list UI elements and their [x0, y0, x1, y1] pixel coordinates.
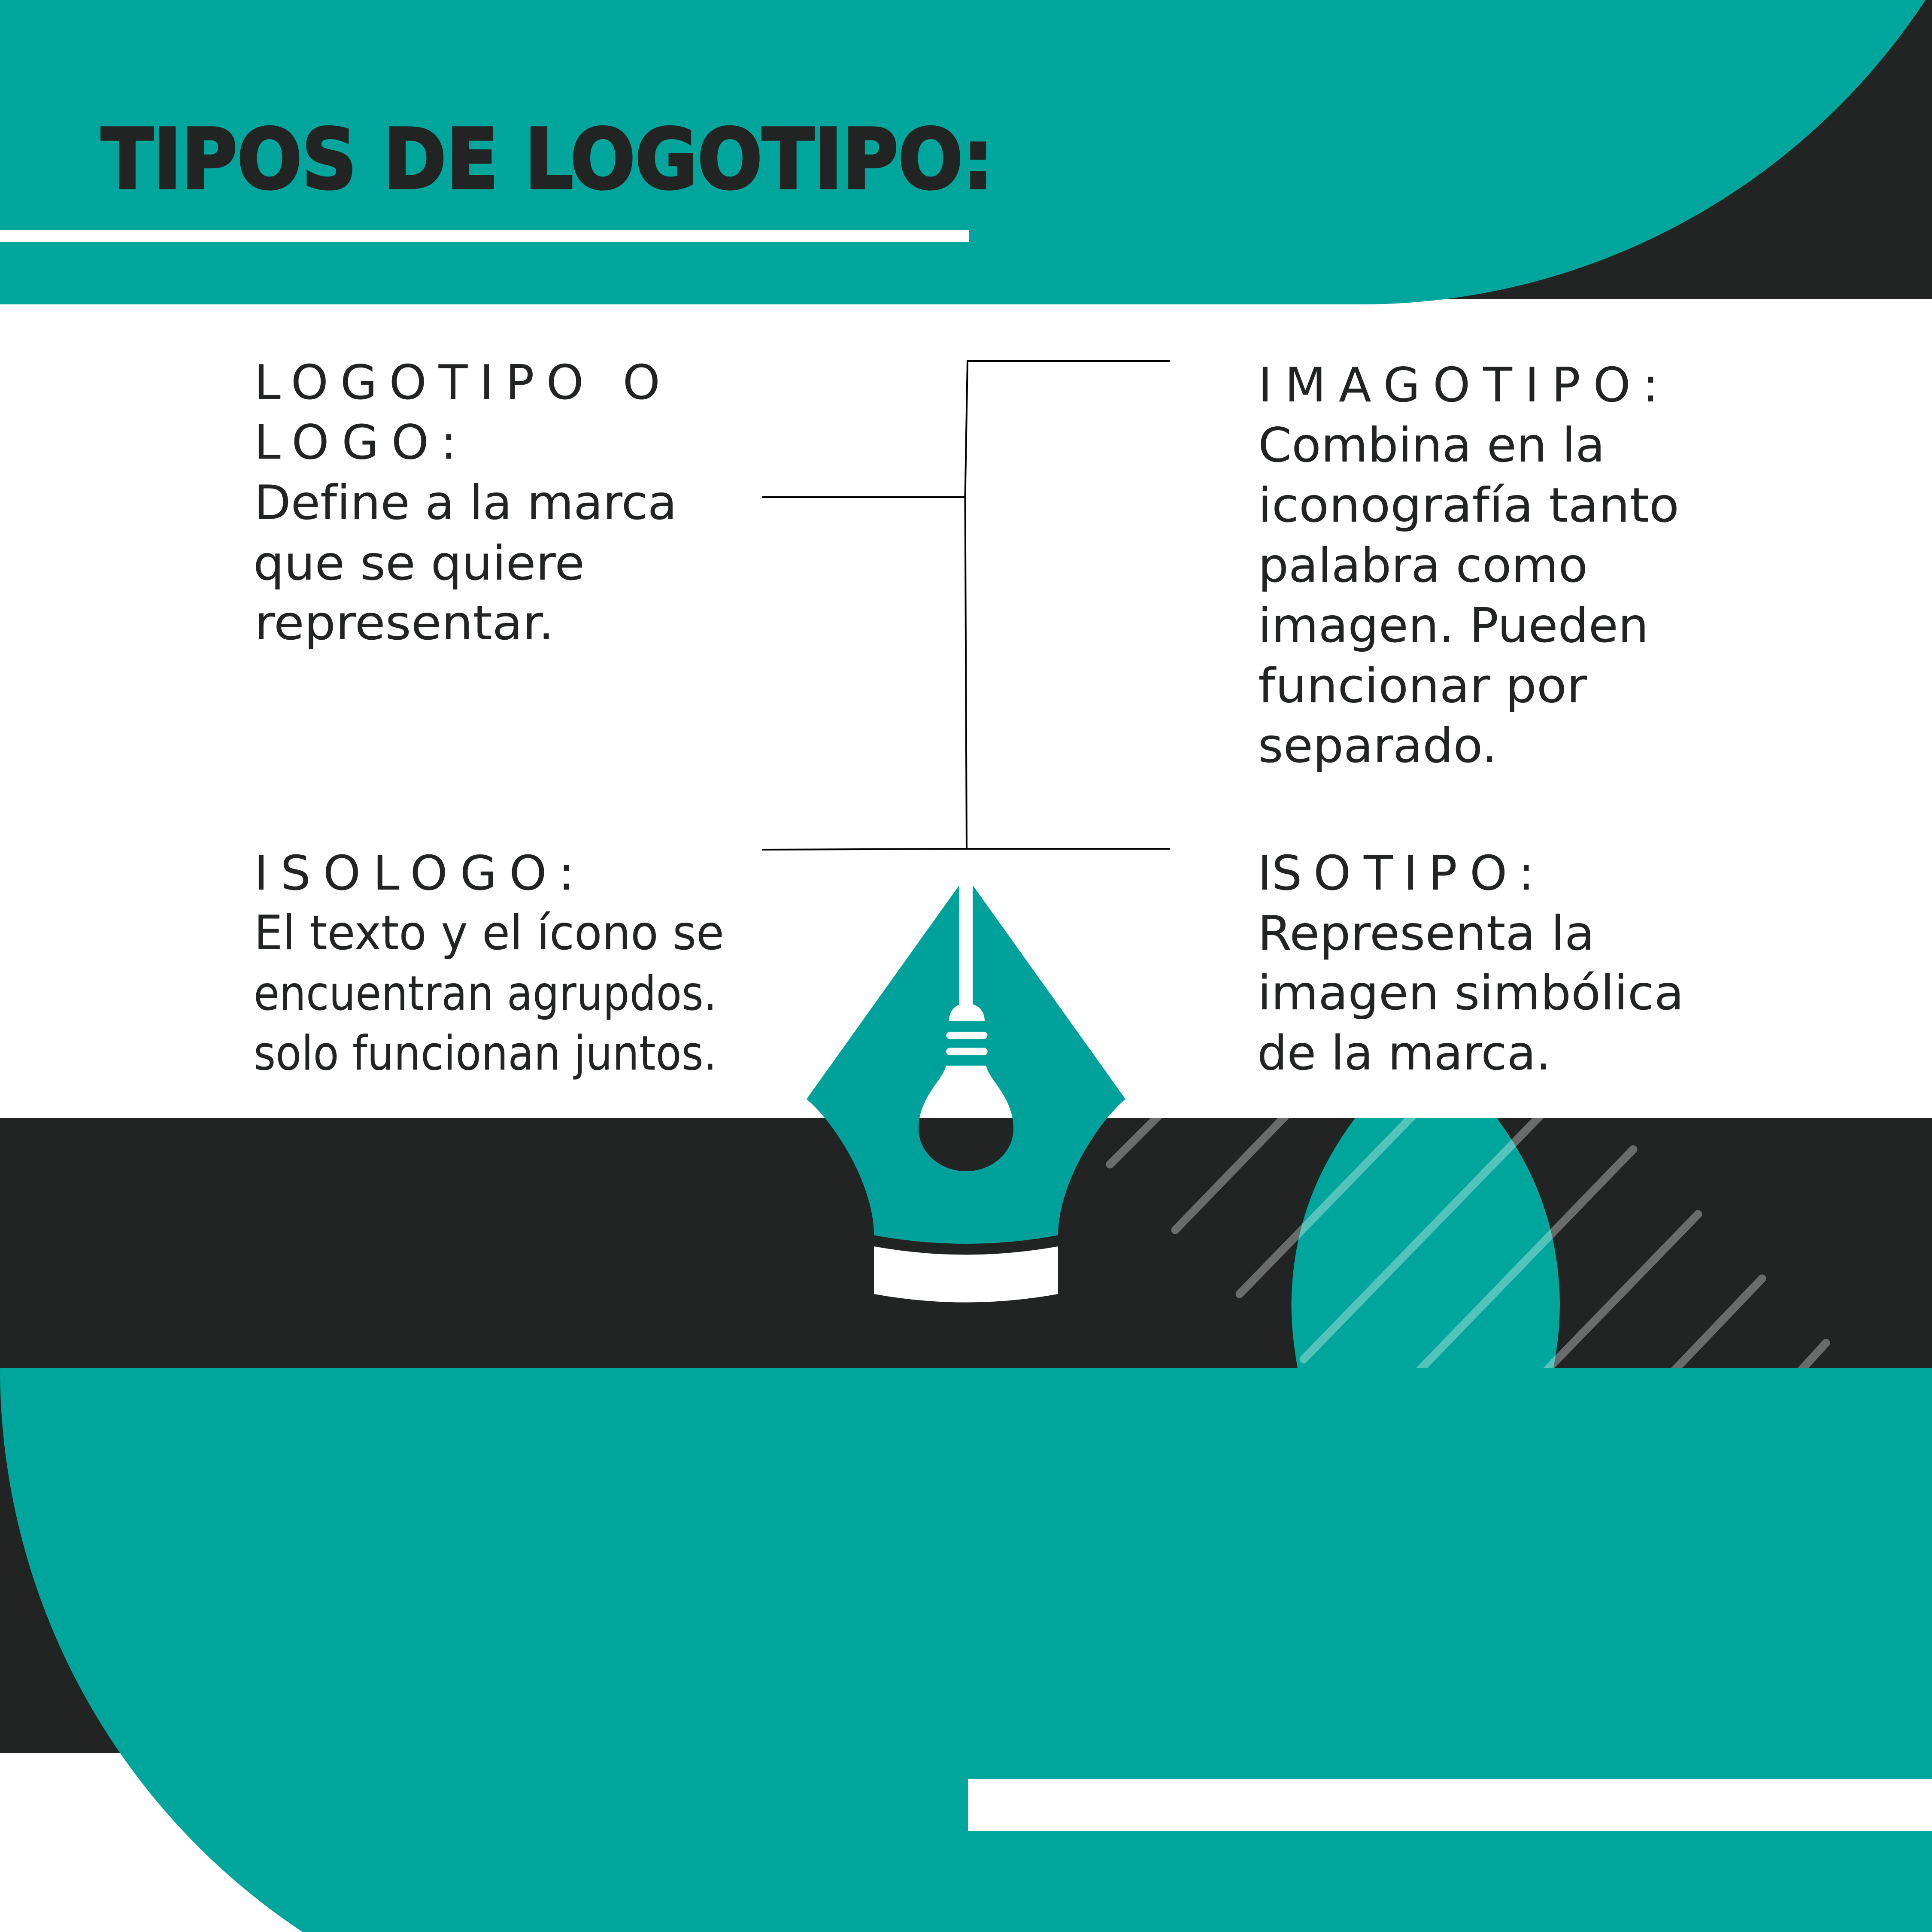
- text block: logotipo o logo: que se quiere: [253, 536, 585, 591]
- text block: imagotipo: funcionar por: [1258, 659, 1587, 714]
- text block: imagotipo: [1258, 358, 1679, 774]
- glass drop shape: [1292, 1118, 1560, 1368]
- text block: imagotipo: palabra como: [1258, 538, 1588, 593]
- icon: pen nib with light bulb: [807, 885, 1125, 1303]
- bracket connector lines: [762, 361, 1170, 850]
- text block: isotipo: de la marca.: [1257, 1026, 1551, 1081]
- text block: logotipo o logo: Define a la marca: [254, 475, 677, 531]
- text block: isologo: ISOLOGO:: [254, 846, 574, 901]
- text block: isologo: El texto y el ícono se: [254, 905, 724, 961]
- text block: isologo: encuentran agrupdos.: [254, 966, 717, 1021]
- text block: logotipo o logo: representar.: [255, 595, 554, 651]
- icon: nib collar: [874, 1246, 1058, 1303]
- text block: isologo: [254, 846, 724, 1081]
- diagonal glass stripes: [1110, 1115, 1826, 1373]
- header panel: teal curved: [0, 0, 1926, 304]
- text block: imagotipo: separado.: [1258, 718, 1497, 774]
- text block: imagotipo: iconografía tanto: [1258, 478, 1679, 533]
- text block: imagotipo: Combina en la: [1258, 418, 1605, 473]
- text block: isotipo: Representa la: [1258, 906, 1595, 961]
- text block: imagotipo: imagen. Pueden: [1258, 598, 1649, 653]
- title: TIPOS DE LOGOTIPO:: [101, 111, 993, 208]
- text block: isotipo: ISOTIPO:: [1258, 846, 1534, 901]
- footer black corner: [0, 1368, 429, 1753]
- text block: logotipo o logo: LOGOTIPO O: [254, 355, 660, 410]
- text block: isotipo: [1257, 846, 1684, 1081]
- title underline bar: [0, 230, 969, 242]
- text block: logotipo o logo: [253, 355, 677, 651]
- text block: isologo: solo funcionan juntos.: [254, 1026, 717, 1081]
- dark band: [0, 1118, 1932, 1368]
- header corner: black: [1288, 0, 1932, 299]
- footer white bar: [968, 1779, 1932, 1831]
- footer panel: teal curved: [0, 1368, 1932, 1932]
- text block: isotipo: imagen simbólica: [1258, 966, 1684, 1021]
- text block: logotipo o logo: LOGO:: [254, 415, 457, 471]
- text block: imagotipo: IMAGOTIPO:: [1258, 358, 1659, 413]
